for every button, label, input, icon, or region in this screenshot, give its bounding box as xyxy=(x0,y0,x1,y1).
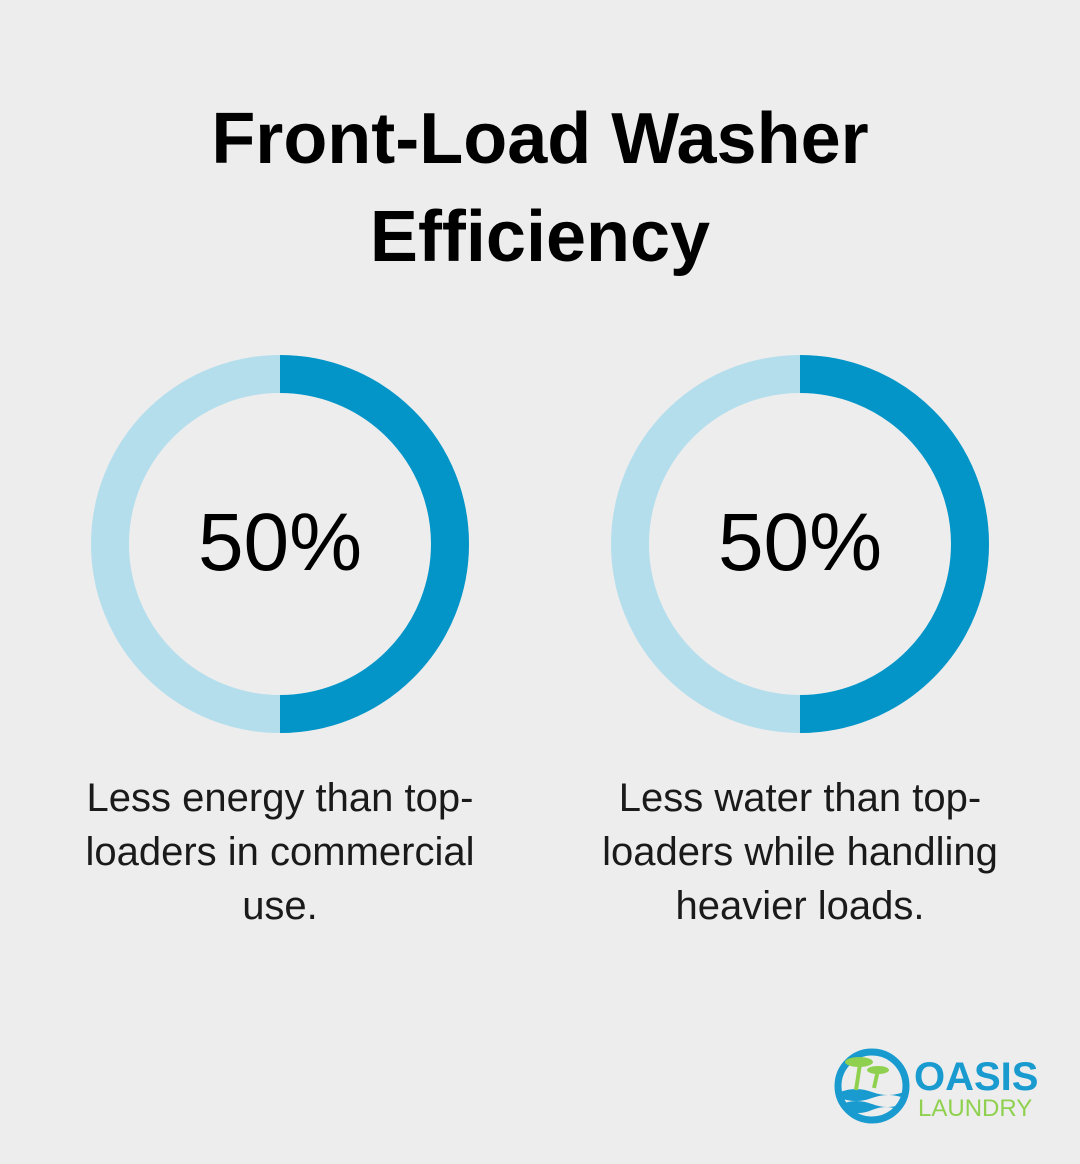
caption: water: loaders while handling xyxy=(602,830,998,874)
logo: Oasis Laundry: LAUNDRY xyxy=(918,1095,1032,1122)
caption: energy xyxy=(85,776,475,928)
caption: energy: loaders in commercial xyxy=(85,830,475,874)
logo: Oasis Laundry xyxy=(834,1048,1038,1124)
donut: water 50%: 50% xyxy=(718,497,882,588)
title: Front-Load Washer xyxy=(211,99,869,179)
caption: energy: use. xyxy=(242,884,318,928)
caption: water xyxy=(602,776,998,928)
donut: energy 50% xyxy=(91,355,469,733)
title: Efficiency xyxy=(370,197,710,277)
title xyxy=(211,99,869,277)
donut: water 50% xyxy=(611,355,989,733)
caption: water: heavier loads. xyxy=(675,884,925,928)
donut: energy 50%: 50% xyxy=(198,497,362,588)
caption: energy: Less energy than top- xyxy=(87,776,473,820)
logo: Oasis Laundry: OASIS xyxy=(914,1055,1038,1099)
caption: water: Less water than top- xyxy=(619,776,981,820)
